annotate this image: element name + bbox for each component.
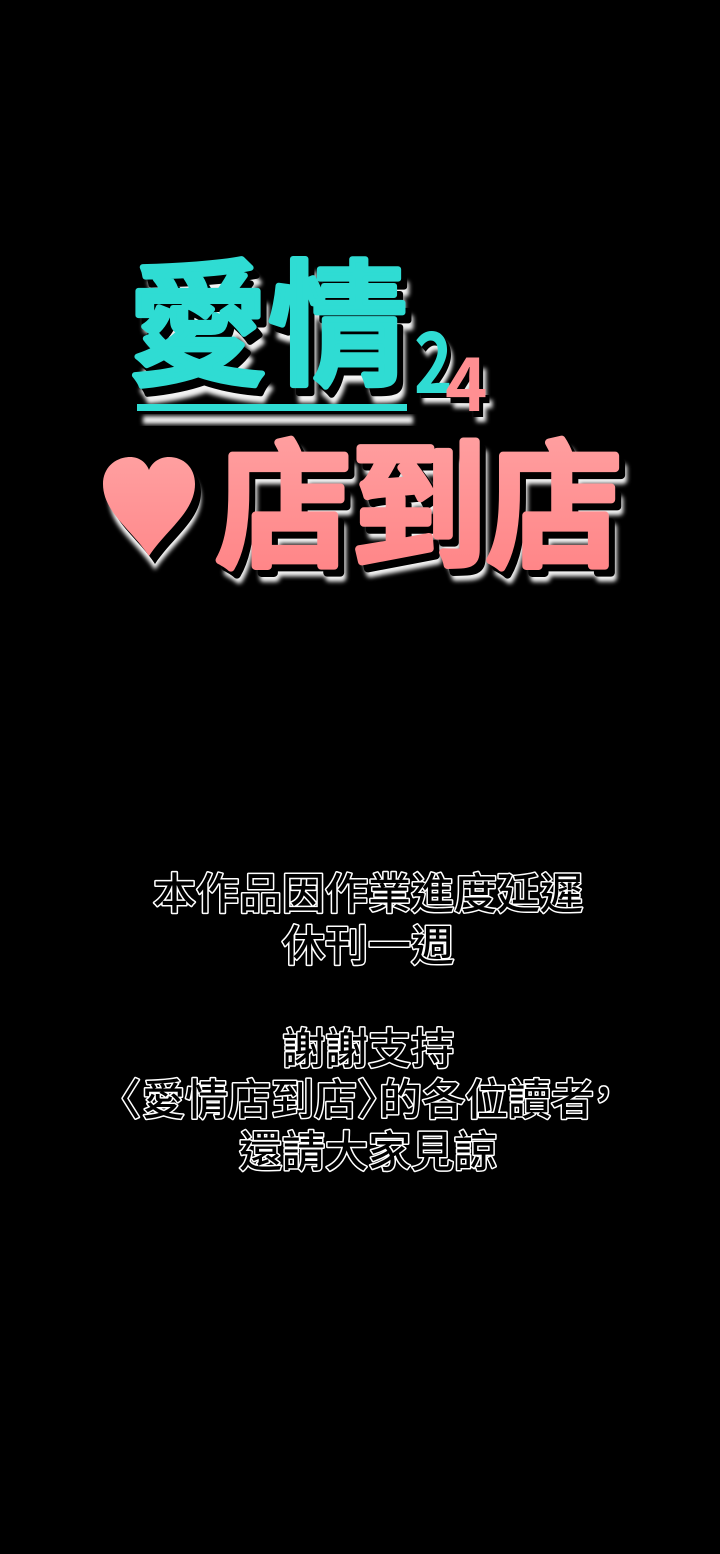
icon: heart [103,457,201,570]
title: 店到店: 店到店 [224,408,630,608]
title: 愛情: 愛情 [136,232,416,429]
title: 店到店: 店到店 [216,396,622,596]
title: 愛情: 愛情 [134,225,414,422]
text: line 1: 本作品因作業進度延遲 [153,871,583,919]
text: line 4: 愛情店到店 [142,1077,357,1125]
notice message [98,871,625,1177]
number 2: 2 [414,299,453,417]
number 4: 4 [449,333,491,438]
text: line 2: 休刊一週 [282,923,454,971]
title: 愛情: 愛情 [128,217,408,414]
title logo [103,217,630,608]
text: line 4: 〈 [98,1077,141,1125]
text: line 4: 的各位讀者 [379,1077,594,1125]
number 2: 2 [420,309,459,427]
number 2: 2 [418,304,457,422]
number 4: 4 [452,338,494,443]
text: line 4: ， [582,1072,625,1120]
text: line 4: 〉 [357,1077,400,1125]
underline [137,404,413,424]
number 4: 4 [445,327,487,432]
text: line 3: 謝謝支持 [282,1026,454,1074]
text: line 5: 還請大家見諒 [239,1129,497,1177]
title: 店到店: 店到店 [222,403,628,603]
